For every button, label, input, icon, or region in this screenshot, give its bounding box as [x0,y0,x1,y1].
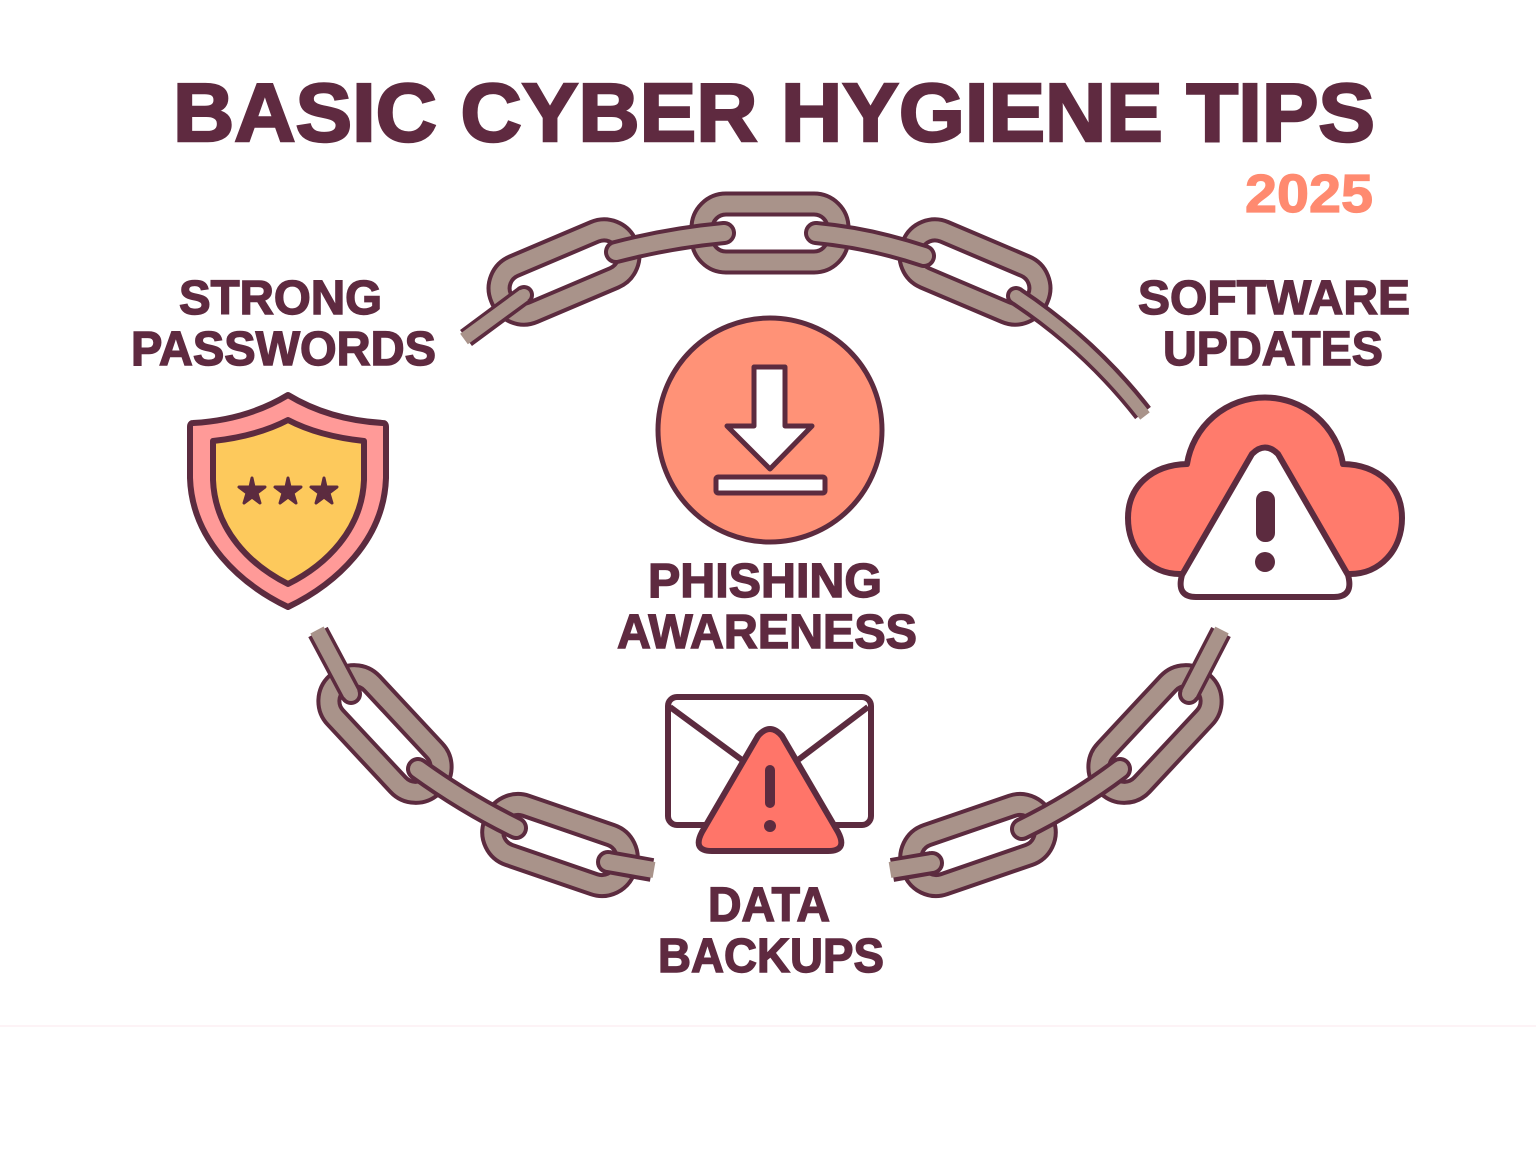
bottom right chain [890,630,1222,892]
chain bar: lower left tail [317,630,362,705]
chain link: lower right lower [904,798,1052,892]
chain bar: top left connector [616,233,724,252]
label: data backups [658,879,884,983]
chain bar: lower right tail [1178,630,1222,705]
chain link: lower left upper [319,666,451,802]
chain bar: right tail [1006,286,1145,416]
label: software updates: SOFTWARE [1138,272,1410,325]
bottom left chain [317,630,654,892]
chain link: top right [903,222,1047,322]
label: phishing awareness: AWARENESS [617,606,917,659]
chain link: lower right upper [1089,666,1221,802]
label: software updates [1138,272,1410,376]
label: phishing awareness [617,555,917,659]
chain bar: lower left end [596,850,654,874]
label: phishing awareness: PHISHING [648,555,882,608]
icon: download circle [658,318,882,542]
label: strong passwords: PASSWORDS [131,323,436,376]
label: strong passwords: STRONG [179,272,382,325]
icon: cloud with warning triangle [1128,398,1402,597]
chain link: top left [492,222,636,322]
chain bar: top right connector [816,233,924,256]
label: software updates: UPDATES [1163,323,1383,376]
chain bar: lower right end [890,851,944,875]
label: data backups: BACKUPS [658,930,884,983]
chain link: top centre [702,204,838,262]
title: BASIC CYBER HYGIENE TIPS [173,66,1375,159]
year: 2025 [1245,164,1373,224]
chain bar: lower left connector [418,769,516,828]
top chain [464,204,1145,416]
icon: envelope with warning triangle [668,697,871,851]
label: strong passwords [131,272,436,376]
chain bar: left tail [464,285,534,339]
icon: shield with password stars [190,395,386,607]
label: data backups: DATA [708,879,830,932]
chain bar: lower right connector [1022,769,1120,829]
chain link: lower left lower [486,798,634,892]
